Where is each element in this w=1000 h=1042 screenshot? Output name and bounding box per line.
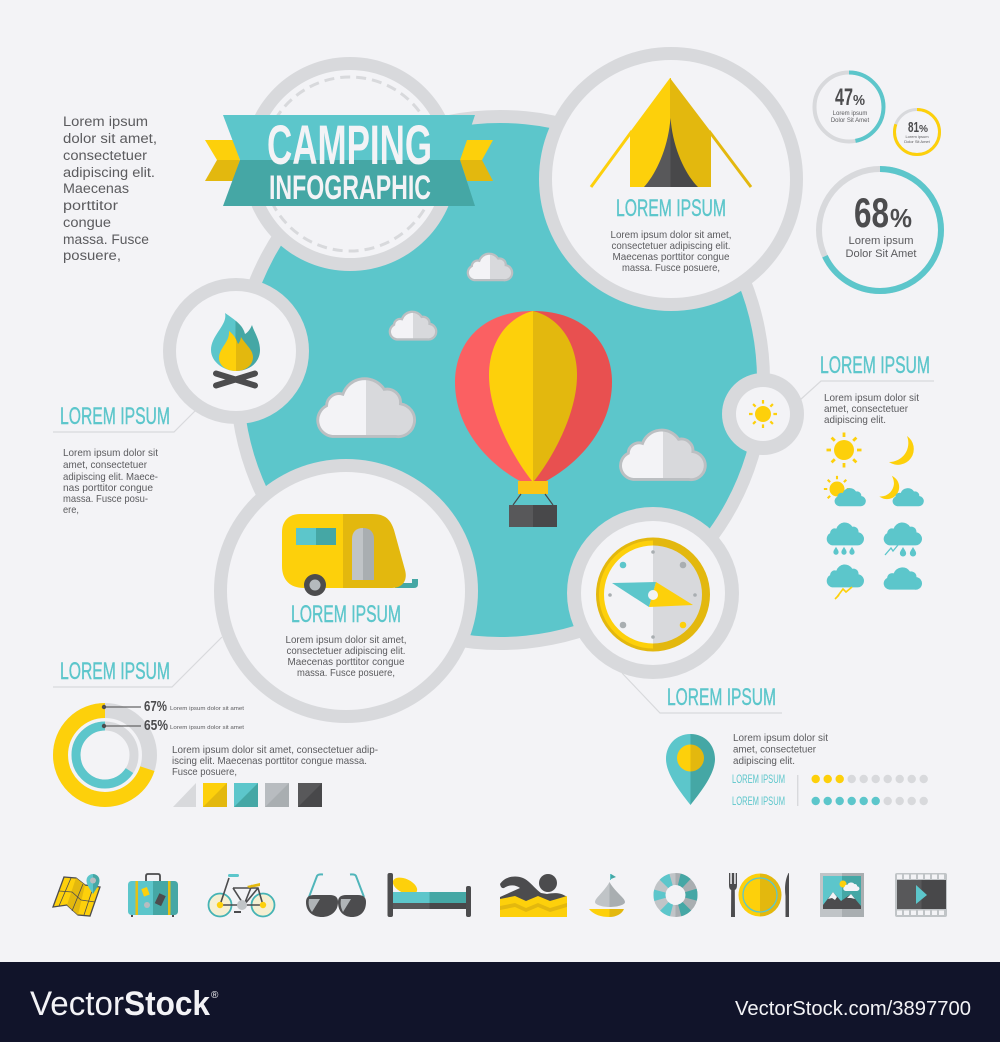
text block: weather: Lorem ipsum dolor sit: [824, 392, 919, 404]
watermark band: Vector: [30, 985, 124, 1023]
icon: suitcase: [128, 874, 178, 917]
text block: map pin: amet, consectetuer: [733, 744, 817, 756]
donut chart: Lorem ipsum dolor sit amet: [170, 706, 245, 712]
icon: hot air balloon: [455, 311, 612, 527]
text block: tent: consectetuer adipiscing elit.: [612, 240, 730, 252]
title ribbon: CAMPING: [267, 113, 432, 176]
icon: campfire: [211, 313, 260, 386]
text block: caravan: Lorem ipsum dolor sit amet,: [286, 634, 406, 646]
icon: compass: [596, 538, 710, 652]
gauge: 68 percent: [819, 169, 941, 291]
icon: tent: [591, 78, 751, 187]
panel: compass circle: [567, 507, 739, 679]
text block: caravan: [286, 634, 406, 679]
gauge: 68 percent: Lorem ipsum: [848, 235, 914, 247]
text block: campfire: Lorem ipsum dolor sit: [63, 447, 158, 459]
rating dots: LOREM IPSUM: [732, 774, 785, 786]
icon: plate with cutlery: [729, 873, 789, 917]
watermark band: VectorStock.com/3897700: [735, 998, 971, 1020]
text block: intro: Lorem ipsum: [63, 114, 148, 129]
text block: caravan: massa. Fusce posuere,: [297, 667, 395, 679]
heading: compass: LOREM IPSUM: [667, 684, 776, 711]
text block: campfire: [63, 447, 158, 516]
text block: tent: Maecenas porttitor congue: [612, 251, 730, 263]
text block: map pin: adipiscing elit.: [733, 756, 795, 767]
panel: campfire circle: [163, 278, 309, 424]
heading: caravan chart: [53, 637, 222, 687]
text block: intro: consectetuer: [63, 148, 148, 163]
rating dots: [732, 774, 928, 808]
gauge: 47 percent: Lorem ipsum: [833, 111, 867, 117]
gauge: 81 percent: Dolor Sit Amet: [904, 139, 931, 144]
text block: caravan: consectetuer adipiscing elit.: [286, 645, 406, 657]
gauge: 68 percent: Dolor Sit Amet: [846, 248, 916, 260]
gauge: 68 percent: 68: [854, 189, 889, 236]
panel: sun circle: [722, 373, 804, 455]
text block: intro: massa. Fusce: [63, 232, 149, 247]
panel: caravan circle: [214, 459, 478, 723]
text block: intro: porttitor: [63, 198, 119, 213]
gauge: 81 percent: 81: [908, 119, 919, 136]
text block: tent: Lorem ipsum dolor sit amet,: [610, 229, 732, 241]
text block: intro: Maecenas: [63, 181, 129, 196]
heading: caravan chart: LOREM IPSUM: [60, 658, 170, 685]
icon: caravan: [282, 514, 418, 596]
panel: central teal sky circle: [230, 110, 770, 650]
text block: campfire: ere,: [63, 504, 79, 516]
text block: map pin: Lorem ipsum dolor sit: [733, 733, 828, 744]
icon: sunglasses: [306, 874, 366, 917]
text block: weather: adipiscing elit.: [824, 414, 886, 426]
icon: clouds in the sky: [318, 254, 705, 480]
text block: campfire: amet, consectetuer: [63, 459, 147, 471]
icon: small sun: [749, 400, 777, 428]
text block: intro: posuere,: [63, 248, 121, 263]
icon: swimmer: [500, 874, 567, 917]
text block: campfire: nas porttitor congue: [63, 482, 153, 494]
text block: intro: adipiscing elit.: [63, 165, 155, 180]
icon: map pin: [666, 734, 715, 805]
panel: tent circle: [539, 47, 803, 311]
icon: photo: [820, 873, 864, 917]
icon: sailboat: [589, 874, 625, 917]
donut chart: 67%: [144, 698, 167, 715]
heading: weather: [800, 352, 934, 400]
gauge: 81 percent: [894, 110, 940, 154]
text block: intro: congue: [63, 215, 111, 230]
text block: chart description: Lorem ipsum dolor sit amet, consectetuer adip-: [172, 744, 378, 756]
gauge: 47 percent: 47: [835, 84, 853, 111]
icon: film: [895, 873, 947, 917]
watermark band: [0, 962, 1000, 1042]
text block: weather: amet, consectetuer: [824, 403, 908, 415]
text block: chart description: Fusce posuere,: [172, 766, 237, 778]
text block: caravan: Maecenas porttitor congue: [288, 656, 405, 668]
watermark band: Stock: [124, 985, 210, 1023]
donut chart: 65%: [144, 717, 168, 734]
text block: chart description: [172, 744, 378, 778]
gauge: 47 percent: [814, 72, 884, 142]
donut chart: [60, 698, 245, 800]
text block: intro: [63, 114, 157, 263]
text block: map pin: [733, 733, 828, 767]
heading: compass: [622, 673, 782, 713]
gauge: 81 percent: %: [919, 124, 928, 135]
heading: tent: LOREM IPSUM: [616, 195, 726, 222]
icon: bed: [388, 873, 471, 917]
watermark band: ®: [211, 990, 219, 1001]
icon: life ring: [660, 879, 692, 911]
gauge: 47 percent: %: [853, 92, 865, 109]
gauge: 47 percent: Dolor Sit Amet: [831, 118, 870, 124]
text block: campfire: adipiscing elit. Maece-: [63, 471, 158, 483]
text block: campfire: massa. Fusce posu-: [63, 493, 148, 505]
gauge: 68 percent: %: [890, 203, 912, 233]
panel: title circle: [243, 57, 457, 271]
heading: caravan: LOREM IPSUM: [291, 601, 401, 628]
title ribbon: INFOGRAPHIC: [269, 169, 431, 207]
title ribbon: [205, 113, 493, 207]
text block: intro: dolor sit amet,: [63, 131, 157, 146]
heading: campfire: LOREM IPSUM: [60, 403, 170, 430]
gauge: 81 percent: Lorem ipsum: [905, 134, 929, 139]
rating dots: LOREM IPSUM: [732, 796, 785, 808]
colour swatches: [173, 783, 322, 807]
icon: weather set: [824, 432, 924, 599]
heading: weather: LOREM IPSUM: [820, 352, 930, 379]
donut chart: Lorem ipsum dolor sit amet: [170, 725, 245, 731]
icon: bicycle: [208, 874, 274, 916]
text block: chart description: iscing elit. Maecenas porttitor congue massa.: [172, 755, 367, 767]
text block: tent: massa. Fusce posuere,: [622, 262, 720, 274]
icon: map: [53, 874, 100, 916]
text block: weather: [824, 392, 919, 426]
text block: tent: [610, 229, 732, 274]
